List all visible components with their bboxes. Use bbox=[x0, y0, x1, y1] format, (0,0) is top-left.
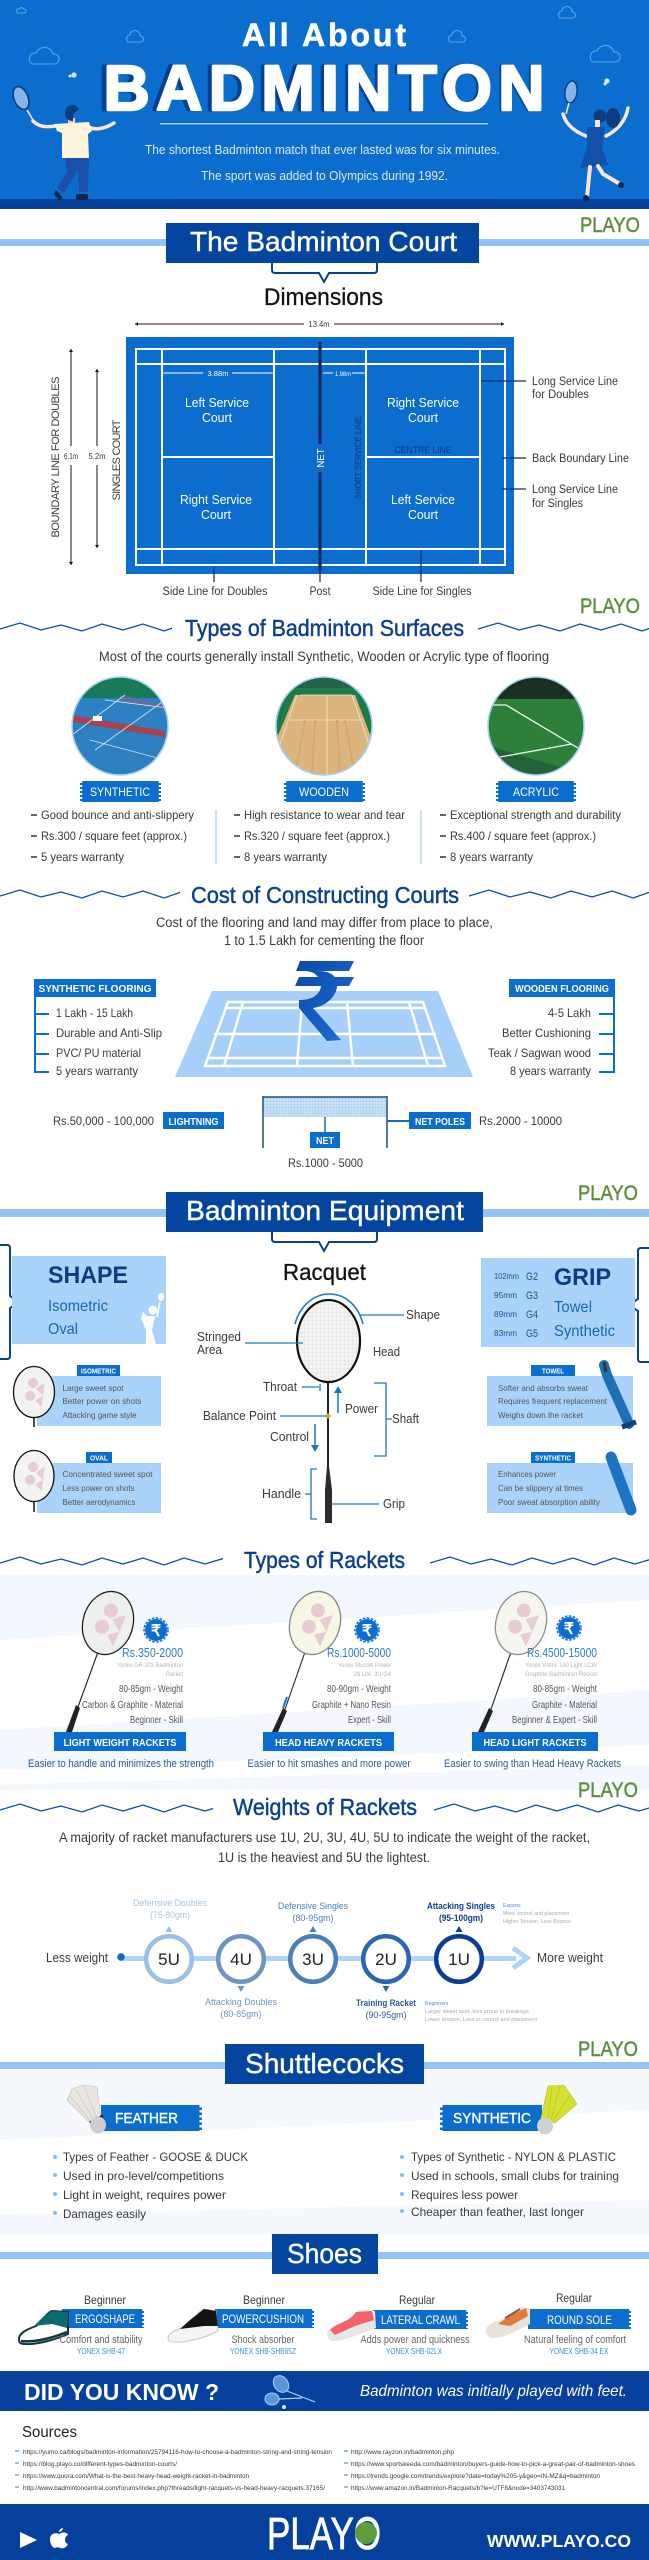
net poles cost: Rs.2000 - 10000 bbox=[479, 1114, 562, 1128]
note: experts: Experts bbox=[503, 1903, 521, 1909]
shoe: round sole: Regular bbox=[556, 2291, 592, 2305]
icon: apple bbox=[50, 2528, 68, 2548]
section: types of rackets bbox=[0, 1547, 649, 1770]
title large: BADMINTON bbox=[99, 52, 543, 124]
racket: head heavy: 29 Lite, 3U-G4 bbox=[354, 1672, 392, 1678]
intro text: A majority of racket manufacturers use 1U, 2U, 3U, 4U, 5U to indicate the weight of the racket, bbox=[59, 1829, 590, 1845]
card: oval: Better aerodynamics bbox=[62, 1497, 136, 1507]
label: training racket: Training Racket bbox=[356, 1998, 417, 2009]
node: 1U bbox=[436, 1926, 482, 1982]
panel: synthetic flooring: SYNTHETIC FLOORING bbox=[38, 983, 152, 995]
inner dimensions: 3.88m bbox=[208, 369, 228, 378]
logo: playo: PLAYO bbox=[578, 1182, 638, 1205]
list: feather: Used in pro-level/competitions bbox=[63, 2169, 224, 2183]
source links left: http://www.badmintoncentral.com/forums/index.php?threads/light-racquets-vs-head-heavy-racquets.37165/ bbox=[23, 2485, 325, 2492]
panel: synthetic flooring bbox=[34, 979, 162, 1078]
service court labels: Left Service bbox=[391, 492, 455, 507]
service court labels: Left Service bbox=[185, 395, 249, 410]
heading: badminton equipment: Badminton Equipment bbox=[186, 1195, 464, 1226]
node: 2U bbox=[363, 1936, 409, 1992]
left side dimension labels: SINGLES COURT bbox=[111, 419, 123, 500]
source links right: https://trends.google.com/trends/explore?date=today%205-y&geo=IN-MZ&q=badminton bbox=[351, 2473, 600, 2480]
service court labels: Right Service bbox=[180, 492, 252, 507]
logo: playo: PLAYO bbox=[580, 214, 640, 237]
label: training racket: (90-95gm) bbox=[366, 2010, 406, 2021]
card: isometric: Attacking game style bbox=[62, 1410, 137, 1420]
card: towel: TOWEL bbox=[542, 1368, 565, 1376]
panel: grip: 102mm bbox=[494, 1271, 519, 1281]
racket: head light: Graphite - Material bbox=[532, 1700, 597, 1711]
racquet part labels: Grip bbox=[383, 1497, 405, 1511]
racket: light weight bbox=[28, 1585, 214, 1770]
inner line labels: CENTRE LINE bbox=[394, 445, 452, 455]
section: shoes bbox=[0, 2234, 649, 2356]
panel: grip: 89mm bbox=[494, 1309, 517, 1319]
shoe: lateral crawl bbox=[327, 2293, 470, 2356]
intro text bbox=[59, 1829, 590, 1865]
icon: synthetic shuttle bbox=[537, 2085, 577, 2134]
intro text: 1U is the heaviest and 5U the lightest. bbox=[218, 1849, 430, 1865]
heading: Types of Badminton Surfaces bbox=[185, 615, 464, 641]
bottom labels: Post bbox=[310, 586, 331, 598]
list: wooden: 8 years warranty bbox=[244, 850, 327, 864]
service court labels: Court bbox=[408, 410, 438, 425]
section: surfaces bbox=[0, 615, 649, 864]
right side labels bbox=[481, 376, 629, 510]
node: 3U bbox=[290, 1926, 336, 1982]
net illustration: Rs.1000 - 5000 bbox=[288, 1156, 363, 1170]
panel: shape bbox=[0, 1245, 166, 1359]
net line: NET bbox=[315, 448, 327, 468]
heading: the badminton court: The Badminton Court bbox=[190, 226, 457, 257]
label: defensive doubles: (75-80gm) bbox=[150, 1910, 190, 1921]
racket: head light: HEAD LIGHT RACKETS bbox=[484, 1737, 586, 1749]
node: 1U: 1U bbox=[448, 1950, 470, 1969]
weight timeline: More weight bbox=[537, 1950, 603, 1965]
lightning cost bbox=[53, 1112, 224, 1129]
label: attacking singles bbox=[427, 1901, 495, 1924]
player: woman bbox=[563, 80, 628, 201]
racquet part labels bbox=[197, 1308, 440, 1519]
shoe: powercushion: Beginner bbox=[243, 2293, 285, 2307]
width dimension: 13.4m bbox=[308, 320, 330, 329]
heading bbox=[0, 615, 649, 641]
node: 5U: 5U bbox=[158, 1950, 180, 1969]
list: synthetic bbox=[31, 808, 194, 864]
panel: grip: G5 bbox=[526, 1328, 538, 1340]
shoe: lateral crawl: YONEX SHB-02LX bbox=[386, 2347, 443, 2356]
logo: playo: PLAYO bbox=[580, 595, 640, 618]
racquet part labels: Throat bbox=[263, 1380, 297, 1394]
card: synthetic grip bbox=[487, 1452, 633, 1513]
racquet part labels: Shaft bbox=[392, 1412, 419, 1426]
racquet part labels: Area bbox=[197, 1343, 222, 1357]
racket: head heavy: Yonex Muscle Power bbox=[338, 1663, 391, 1669]
shoe: ergoshape: ERGOSHAPE bbox=[75, 2312, 135, 2326]
photo: acrylic bbox=[486, 676, 586, 776]
label: defensive doubles: Defensive Doubles bbox=[133, 1898, 207, 1909]
node: 5U bbox=[146, 1926, 192, 1982]
list: wooden: High resistance to wear and tear bbox=[244, 808, 405, 822]
intro text: The shortest Badminton match that ever lasted was for six minutes. bbox=[145, 143, 500, 157]
label: defensive singles: Defensive Singles bbox=[278, 1901, 348, 1912]
page background tints bbox=[0, 1575, 649, 2235]
panel: wooden flooring: WOODEN FLOORING bbox=[515, 983, 609, 995]
service court labels: Court bbox=[202, 410, 232, 425]
heading: the badminton court bbox=[0, 223, 649, 282]
label: attacking singles: Attacking Singles bbox=[427, 1901, 495, 1912]
racquet diagram: Racquet bbox=[283, 1259, 367, 1285]
panel: synthetic flooring: Durable and Anti-Slip bbox=[56, 1026, 162, 1040]
service court labels: Right Service bbox=[387, 395, 459, 410]
label: attacking singles: (95-100gm) bbox=[439, 1913, 483, 1924]
bottom labels: Side Line for Doubles bbox=[162, 586, 268, 598]
width dimension bbox=[135, 320, 504, 329]
heading bbox=[0, 1794, 649, 1820]
section: shuttlecocks bbox=[0, 2044, 649, 2221]
banner: did you know: Badminton was initially played with feet. bbox=[360, 2383, 627, 2400]
title large: BADMINTON bbox=[104, 52, 544, 124]
right side labels: for Singles bbox=[532, 498, 583, 510]
logo: playo: PLAYO bbox=[578, 2038, 638, 2061]
net poles cost: NET POLES bbox=[415, 1117, 465, 1128]
panel: wooden flooring: 4-5 Lakh bbox=[548, 1006, 591, 1020]
heading: Types of Rackets bbox=[244, 1547, 405, 1573]
card: oval: OVAL bbox=[90, 1456, 109, 1462]
note: beginners: Lower tension, Less in control and placement bbox=[425, 2017, 538, 2023]
racket: head heavy: Expert - Skill bbox=[348, 1715, 391, 1726]
photo: synthetic bbox=[70, 676, 170, 776]
card: isometric bbox=[14, 1365, 161, 1427]
shoe: powercushion: POWERCUSHION bbox=[222, 2312, 304, 2326]
shoe: lateral crawl: Regular bbox=[399, 2293, 435, 2307]
sources: Sources bbox=[22, 2424, 77, 2441]
racket: light weight: ₹ bbox=[151, 1623, 161, 1640]
list: synthetic: Requires less power bbox=[411, 2188, 518, 2202]
shoe: ergoshape: Comfort and stability bbox=[60, 2334, 143, 2346]
list: synthetic bbox=[400, 2150, 619, 2219]
panel: grip: Synthetic bbox=[554, 1323, 615, 1340]
shoe: lateral crawl: LATERAL CRAWL bbox=[381, 2313, 460, 2327]
racket: head heavy: Easier to hit smashes and more power bbox=[248, 1758, 411, 1770]
inner dimensions bbox=[163, 369, 365, 378]
heading: Shuttlecocks bbox=[245, 2048, 404, 2079]
list: synthetic: Rs.300 / square feet (approx.) bbox=[41, 829, 187, 843]
node: 2U: 2U bbox=[375, 1950, 397, 1969]
racket: head light bbox=[444, 1585, 621, 1770]
intro text bbox=[156, 915, 493, 948]
source links right bbox=[351, 2449, 636, 2492]
banner: did you know bbox=[0, 2371, 649, 2411]
sources bbox=[15, 2424, 636, 2492]
racquet diagram bbox=[197, 1259, 440, 1523]
list: synthetic: Cheaper than feather, last longer bbox=[411, 2205, 584, 2219]
source links right: http://www.rayzon.in/badminton.php bbox=[351, 2449, 454, 2456]
shoe: ergoshape: Beginner bbox=[84, 2293, 126, 2307]
icon: rupee bbox=[295, 961, 354, 1041]
shoe: round sole: YONEX SHB-34 EX bbox=[550, 2347, 609, 2356]
label: attacking doubles: Attacking Doubles bbox=[205, 1997, 277, 2008]
website: WWW.PLAYO.CO bbox=[487, 2531, 631, 2551]
card: towel: Softer and absorbs sweat bbox=[498, 1383, 589, 1393]
note: beginners: Larger sweet spot, less prone to breakage bbox=[425, 2009, 529, 2015]
shoe: lateral crawl: Adds power and quickness bbox=[360, 2334, 470, 2346]
icon: feather shuttle bbox=[67, 2085, 106, 2134]
note: experts: More control and placement bbox=[503, 1911, 570, 1917]
racquet part labels: Shape bbox=[406, 1308, 440, 1322]
banner: did you know: DID YOU KNOW ? bbox=[24, 2379, 219, 2405]
inner dimensions: 1.98m bbox=[335, 371, 351, 378]
panel: grip: Towel bbox=[554, 1299, 592, 1316]
section: weights of rackets bbox=[0, 1794, 649, 2023]
panel: synthetic flooring: 1 Lakh - 15 Lakh bbox=[56, 1006, 133, 1020]
racquet part labels: Power bbox=[345, 1402, 378, 1416]
label: attacking doubles: (80-85gm) bbox=[220, 2009, 262, 2020]
shoe: round sole: ROUND SOLE bbox=[547, 2313, 612, 2327]
label: defensive singles: (80-95gm) bbox=[292, 1913, 334, 1924]
right side labels: Long Service Line bbox=[532, 484, 618, 496]
weight timeline bbox=[46, 1898, 603, 2023]
card: oval: Less power on shots bbox=[62, 1483, 134, 1493]
source links right: https://www.sportskeeda.com/badminton/buyers-guide-how-to-pick-a-great-pair-of-badminton-shoes bbox=[351, 2461, 636, 2468]
court illustration bbox=[175, 991, 473, 1077]
racket: light weight: Carbon & Graphite - Material bbox=[82, 1700, 183, 1711]
racket: head light: Easier to swing than Head Heavy Rackets bbox=[444, 1758, 621, 1770]
racket: light weight: Yonex GR 303 Badminton bbox=[117, 1663, 183, 1669]
service court labels: Court bbox=[201, 507, 231, 522]
card: towel: Requires frequent replacement bbox=[498, 1396, 608, 1406]
shoe: powercushion bbox=[168, 2293, 314, 2356]
heading: badminton equipment bbox=[0, 1192, 649, 1251]
panel: grip: 95mm bbox=[494, 1290, 517, 1300]
source links left bbox=[23, 2449, 332, 2492]
panel: shape: SHAPE bbox=[48, 1262, 128, 1289]
source links left: https://yumo.ca/blogs/badminton-information/25794116-how-to-choose-a-badminton-string-and-string-tension bbox=[23, 2449, 332, 2456]
icon: rackets bbox=[265, 2373, 315, 2409]
intro text: Most of the courts generally install Synthetic, Wooden or Acrylic type of flooring bbox=[99, 649, 549, 664]
lightning cost: Rs.50,000 - 100,000 bbox=[53, 1114, 154, 1128]
ribbons: ACRYLIC bbox=[513, 785, 559, 799]
card: towel bbox=[487, 1362, 636, 1427]
list: acrylic: Exceptional strength and durability bbox=[450, 808, 621, 822]
card: synthetic grip: Enhances power bbox=[498, 1469, 556, 1479]
service court labels bbox=[180, 395, 459, 522]
shoe: ergoshape: YONEX SHB-47 bbox=[77, 2347, 125, 2356]
panel: wooden flooring bbox=[488, 979, 615, 1078]
node: 4U: 4U bbox=[230, 1950, 252, 1969]
list: acrylic bbox=[440, 808, 621, 864]
subheading: dimensions: Dimensions bbox=[264, 284, 383, 311]
heading bbox=[0, 2234, 649, 2274]
right side labels: Long Service Line bbox=[532, 376, 618, 388]
racket: head light: Graphite Badminton Racket bbox=[525, 1672, 597, 1678]
list: feather: Light in weight, requires power bbox=[63, 2188, 226, 2202]
ribbon: synthetic: SYNTHETIC bbox=[453, 2111, 531, 2127]
racket: head heavy: ₹ bbox=[362, 1623, 372, 1640]
left side dimension labels: 5.2m bbox=[88, 452, 106, 461]
racket: head light: Yonex Voltric 100 Light LCW bbox=[525, 1663, 597, 1669]
left side dimension labels bbox=[50, 349, 123, 565]
list: feather bbox=[53, 2150, 248, 2221]
left side dimension labels: 6.1m bbox=[64, 452, 78, 461]
racket: head heavy bbox=[248, 1585, 411, 1770]
panel: wooden flooring: Better Cushioning bbox=[502, 1026, 591, 1040]
hero clouds bbox=[16, 6, 620, 64]
card: isometric: ISOMETRIC bbox=[81, 1368, 116, 1376]
shoe: round sole: Natural feeling of comfort bbox=[524, 2334, 626, 2346]
panel: synthetic flooring: 5 years warranty bbox=[56, 1064, 138, 1078]
racquet drawing bbox=[297, 1300, 360, 1523]
racket: light weight: 80-85gm - Weight bbox=[119, 1684, 183, 1695]
intro text: The sport was added to Olympics during 1992. bbox=[201, 169, 448, 183]
racket: head light: ₹ bbox=[564, 1621, 574, 1638]
net poles cost bbox=[387, 1112, 562, 1129]
heading bbox=[0, 882, 649, 908]
court diagram bbox=[50, 320, 629, 598]
icon: player bbox=[141, 1293, 164, 1344]
player: man bbox=[10, 84, 114, 201]
list: synthetic: Good bounce and anti-slippery bbox=[41, 808, 194, 822]
racket: head heavy: Rs.1000-5000 bbox=[327, 1646, 391, 1660]
footer bbox=[0, 2504, 649, 2560]
service court labels: Court bbox=[408, 507, 438, 522]
card: synthetic grip: Can be slippery at times bbox=[498, 1483, 583, 1493]
panel: shape: Oval bbox=[48, 1321, 78, 1338]
logo: playo: PLAYO bbox=[578, 1779, 638, 1802]
net illustration bbox=[263, 1096, 387, 1170]
intro text: 1 to 1.5 Lakh for cementing the floor bbox=[224, 933, 424, 948]
panel: wooden flooring: 8 years warranty bbox=[510, 1064, 591, 1078]
icon: play store bbox=[20, 2532, 37, 2548]
panel: grip: GRIP bbox=[554, 1264, 611, 1291]
card: isometric: Large sweet spot bbox=[62, 1383, 124, 1393]
racquet part labels: Handle bbox=[262, 1487, 301, 1501]
source links left: https://blog.playo.co/different-types-badminton-courts/ bbox=[23, 2461, 177, 2468]
hero banner bbox=[0, 0, 649, 209]
racket: head light: Beginner & Expert - Skill bbox=[512, 1715, 597, 1726]
bottom labels: Side Line for Singles bbox=[372, 586, 472, 598]
intro text: Cost of the flooring and land may differ from place to place, bbox=[156, 915, 493, 930]
list: acrylic: Rs.400 / square feet (approx.) bbox=[450, 829, 596, 843]
heading bbox=[0, 2044, 649, 2084]
left side dimension labels: BOUNDARY LINE FOR DOUBLES bbox=[50, 376, 62, 538]
racket: head heavy: HEAD HEAVY RACKETS bbox=[275, 1737, 382, 1749]
racquet part labels: Stringed bbox=[197, 1330, 241, 1344]
logo: playo large: PLAYO bbox=[267, 2508, 381, 2559]
power and control arrows bbox=[311, 1386, 342, 1452]
panel: grip: G3 bbox=[526, 1290, 538, 1302]
card: oval bbox=[14, 1450, 161, 1513]
lightning cost: LIGHTNING bbox=[168, 1117, 219, 1128]
racket: light weight: Easier to handle and minimizes the strength bbox=[28, 1758, 214, 1770]
right side labels: for Doubles bbox=[532, 389, 589, 401]
card: synthetic grip: Poor sweat absorption ability bbox=[498, 1497, 601, 1507]
label: training racket bbox=[356, 1998, 417, 2021]
heading bbox=[0, 1547, 649, 1573]
shoe: powercushion: Shock absorber bbox=[232, 2334, 295, 2346]
weight timeline: Less weight bbox=[46, 1950, 108, 1965]
card: isometric: Better power on shots bbox=[62, 1396, 142, 1406]
panel: grip bbox=[481, 1248, 649, 1362]
racquet part labels: Head bbox=[373, 1345, 400, 1359]
racket: light weight: Beginner - Skill bbox=[130, 1715, 183, 1726]
ribbons: WOODEN bbox=[299, 785, 349, 799]
list: acrylic: 8 years warranty bbox=[450, 850, 533, 864]
node: 4U bbox=[218, 1936, 264, 1992]
panel: grip: G2 bbox=[526, 1271, 538, 1283]
shoe: powercushion: YONEX SHB-SHB65Z bbox=[230, 2347, 296, 2356]
title small: All About bbox=[242, 17, 406, 53]
racket: light weight: Racket bbox=[166, 1672, 183, 1678]
heading: Weights of Rackets bbox=[233, 1794, 417, 1820]
racquet part labels: Control bbox=[270, 1430, 309, 1444]
inner line labels bbox=[353, 417, 452, 499]
ribbon: feather bbox=[101, 2105, 202, 2131]
list: feather: Types of Feather - GOOSE & DUCK bbox=[63, 2150, 248, 2164]
racket: light weight: LIGHT WEIGHT RACKETS bbox=[64, 1737, 176, 1749]
racket: head heavy: Graphite + Nano Resin bbox=[312, 1700, 391, 1711]
racket: light weight: Rs.350-2000 bbox=[122, 1646, 183, 1660]
card: synthetic grip: SYNTHETIC bbox=[535, 1456, 571, 1462]
shuttle icons bbox=[68, 72, 610, 86]
section: cost bbox=[0, 882, 649, 1170]
node: 3U: 3U bbox=[302, 1950, 324, 1969]
racquet part labels: Balance Point bbox=[203, 1409, 276, 1423]
ribbon: feather: FEATHER bbox=[115, 2111, 178, 2127]
source links left: https://www.quora.com/What-is-the-best-heavy-head-weight-racket-in-badminton bbox=[23, 2473, 249, 2480]
source links right: https://www.amazon.in/Badminton-Racquets/b?ie=UTF8&node=3403743031 bbox=[351, 2485, 565, 2492]
label: defensive doubles bbox=[133, 1898, 207, 1921]
panel: wooden flooring: Teak / Sagwan wood bbox=[488, 1046, 591, 1060]
ribbons: SYNTHETIC bbox=[90, 785, 150, 799]
list: wooden bbox=[234, 808, 405, 864]
panel: grip: 83mm bbox=[494, 1328, 517, 1338]
bottom labels bbox=[162, 550, 472, 598]
racket: head light: Rs.4500-15000 bbox=[527, 1646, 597, 1660]
right side labels: Back Boundary Line bbox=[532, 453, 629, 465]
photo: wooden bbox=[274, 676, 374, 776]
inner line labels: SHORT SERVICE LINE bbox=[353, 417, 363, 499]
panel: shape: Isometric bbox=[48, 1298, 108, 1315]
note: beginners bbox=[425, 2001, 538, 2023]
panel: grip: G4 bbox=[526, 1309, 538, 1321]
label: defensive singles bbox=[278, 1901, 348, 1924]
card: oval: Concentrated sweet spot bbox=[62, 1469, 153, 1479]
list: feather: Damages easily bbox=[63, 2207, 146, 2221]
heading: Shoes bbox=[287, 2238, 362, 2269]
note: experts: Higher Tension, Less Bounce bbox=[503, 1919, 571, 1925]
ribbons bbox=[80, 781, 576, 802]
net illustration: NET bbox=[316, 1136, 334, 1147]
shoe: round sole bbox=[486, 2291, 631, 2356]
shoe: ergoshape bbox=[19, 2293, 144, 2356]
racket: head heavy: 80-90gm - Weight bbox=[327, 1684, 391, 1695]
list: synthetic: Types of Synthetic - NYLON & PLASTIC bbox=[411, 2150, 616, 2164]
list: wooden: Rs.320 / square feet (approx.) bbox=[244, 829, 390, 843]
racket: head light: 80-85gm - Weight bbox=[533, 1684, 597, 1695]
intro text bbox=[145, 143, 500, 183]
label: attacking doubles bbox=[205, 1997, 277, 2020]
panel: synthetic flooring: PVC/ PU material bbox=[56, 1046, 141, 1060]
note: beginners: Beginners bbox=[425, 2001, 449, 2007]
list: synthetic: Used in schools, small clubs for training bbox=[411, 2169, 619, 2183]
ribbon: synthetic bbox=[440, 2105, 542, 2131]
card: towel: Weighs down the racket bbox=[498, 1410, 584, 1420]
heading: Cost of Constructing Courts bbox=[191, 882, 459, 908]
note: experts bbox=[503, 1903, 571, 1925]
list: synthetic: 5 years warranty bbox=[41, 850, 124, 864]
